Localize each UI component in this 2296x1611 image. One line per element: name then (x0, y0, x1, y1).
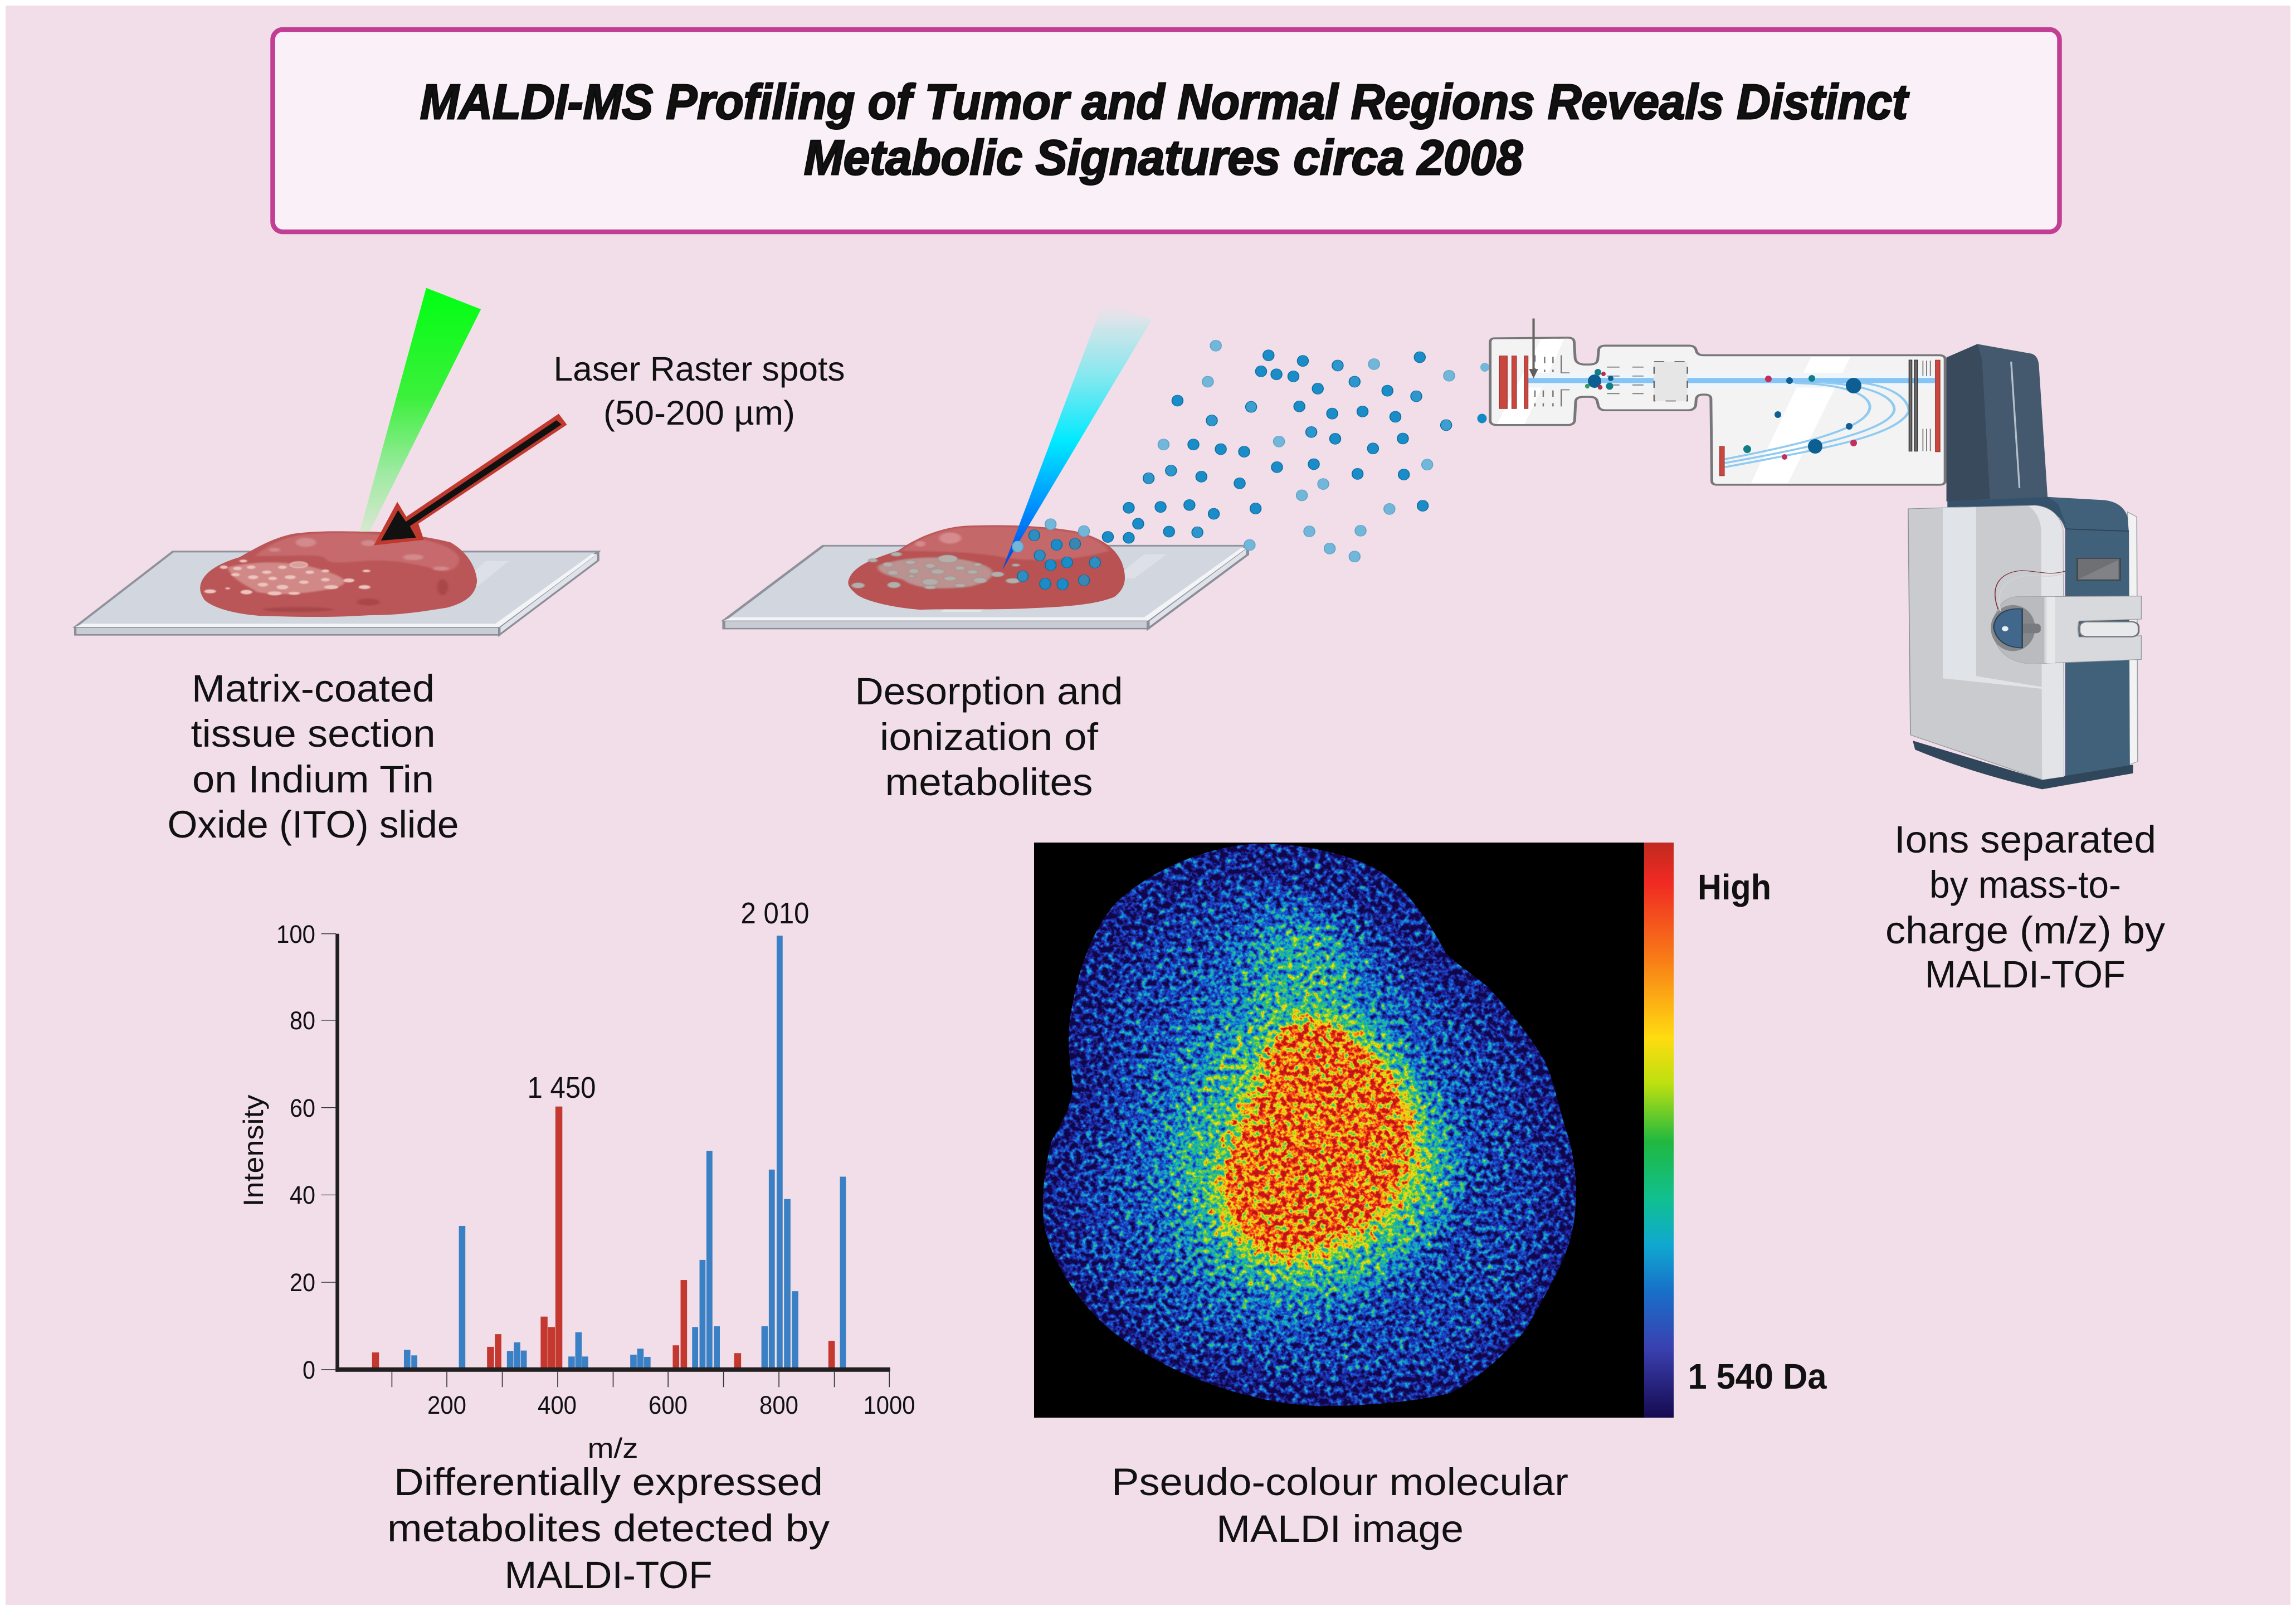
label: matrix-coated tissue: tissue section (191, 712, 436, 755)
icon: TOF flight tube schematic (1478, 318, 1945, 485)
bar chart: spectrum peaks (372, 936, 846, 1370)
axis numbers: 400 (538, 1391, 577, 1419)
panel: molecular MALDI image (1034, 843, 1827, 1550)
scale label: high: High (1698, 867, 1771, 907)
axis numbers: 800 (759, 1391, 798, 1419)
label: differentially expressed: MALDI-TOF (505, 1554, 712, 1597)
axis numbers: 40 (290, 1181, 315, 1209)
label: desorption and ionization: ionization of (880, 716, 1099, 758)
label: matrix-coated tissue: Matrix-coated (192, 667, 435, 710)
label: pseudo-colour image (1112, 1461, 1568, 1550)
label: desorption and ionization: Desorption and (855, 670, 1123, 713)
label: ions separated (1885, 818, 2166, 996)
label: matrix-coated tissue: Oxide (ITO) slide (167, 803, 459, 846)
x axis label: m/z (587, 1433, 638, 1464)
icon: tissue section (200, 531, 477, 617)
image background (1034, 843, 1644, 1418)
matrix speckles (204, 559, 371, 595)
y axis label: Intensity (238, 1094, 269, 1207)
axis numbers: 0 (303, 1356, 315, 1384)
title (420, 74, 1910, 185)
colour scale bar (1644, 843, 1674, 1418)
label: differentially expressed: metabolites detected by (387, 1507, 830, 1550)
panel: matrix-coated tissue section with laser (75, 288, 845, 846)
label: differentially expressed: Differentially expressed (394, 1461, 823, 1503)
panel: MALDI-TOF instrument (1478, 318, 2166, 996)
scale label: 1 540 Da: 1 540 Da (1688, 1356, 1827, 1396)
axis numbers (276, 920, 915, 1419)
icon: UV laser beam (1002, 301, 1152, 570)
label: ions separated: Ions separated (1894, 818, 2156, 861)
arrow: laser spot pointer (374, 413, 567, 546)
axis numbers: 100 (276, 920, 315, 948)
icon: green laser beam (360, 288, 481, 532)
axis numbers: 60 (290, 1094, 315, 1122)
icon: tissue section 2 (848, 525, 1125, 610)
title: MALDI-MS Profiling of Tumor and Normal Regions Reveals Distinct (420, 74, 1910, 129)
label: desorption and ionization (855, 670, 1123, 804)
peak labels: 1 450 (527, 1071, 596, 1104)
icon: glass slide 2 (724, 546, 1247, 629)
panel: desorption and ionization (724, 301, 1455, 804)
label: differentially expressed (387, 1461, 830, 1597)
panel: mass spectrum (238, 897, 915, 1597)
label: laser raster spots (554, 350, 845, 432)
axis numbers: 600 (649, 1391, 688, 1419)
label: matrix-coated tissue (167, 667, 459, 846)
label: laser raster spots: (50-200 µm) (603, 394, 795, 432)
title panel (273, 30, 2059, 232)
title: Metabolic Signatures circa 2008 (804, 130, 1523, 185)
axis numbers: 20 (290, 1268, 315, 1297)
icon: mass spectrometer (1908, 344, 2142, 789)
axis numbers: 200 (427, 1391, 466, 1419)
label: ions separated: by mass-to- (1929, 863, 2121, 906)
arrow: laser entry (1529, 318, 1538, 378)
chart axes (321, 934, 890, 1387)
ions in TOF (1478, 363, 1861, 460)
label: laser raster spots: Laser Raster spots (554, 350, 845, 388)
label: pseudo-colour image: MALDI image (1216, 1507, 1464, 1550)
label: desorption and ionization: metabolites (885, 761, 1093, 804)
icon: desorbed metabolite ions (1012, 340, 1455, 590)
label: pseudo-colour image: Pseudo-colour molecular (1112, 1461, 1568, 1503)
band and slot (1993, 596, 2142, 664)
peak labels (527, 897, 809, 1104)
icon: glass slide (75, 552, 598, 635)
heat map: pseudo-colour tissue (1043, 844, 1576, 1406)
peak labels: 2 010 (741, 897, 809, 930)
axis numbers: 80 (290, 1006, 315, 1035)
label: ions separated: charge (m/z) by (1885, 909, 2166, 952)
axis numbers: 1000 (864, 1391, 915, 1419)
matrix speckles gray (852, 552, 1020, 589)
pump knob (1991, 605, 2041, 651)
label: ions separated: MALDI-TOF (1925, 953, 2126, 996)
label: matrix-coated tissue: on Indium Tin (192, 758, 434, 801)
